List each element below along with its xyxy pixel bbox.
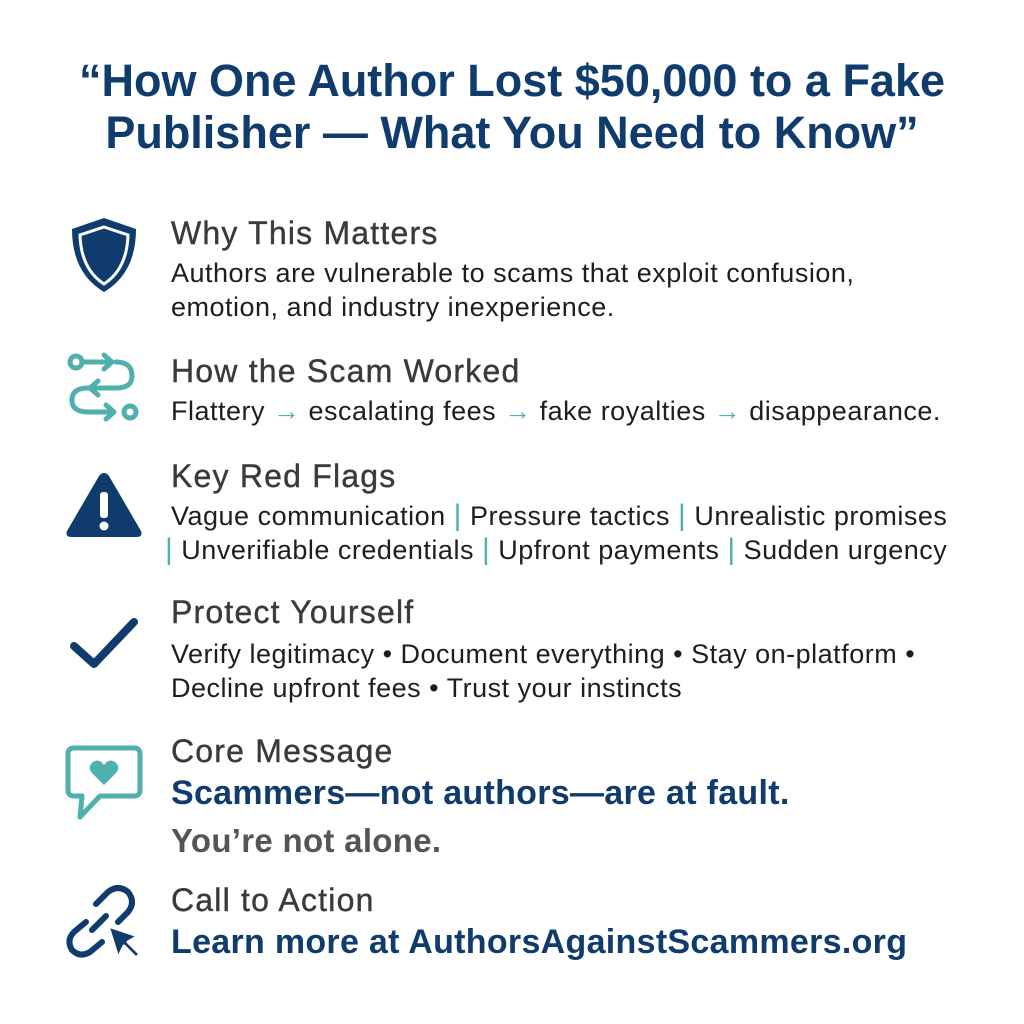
heading: core: Core Message bbox=[171, 733, 394, 769]
title: “How One Author Lost $50,000 to a Fake bbox=[79, 55, 945, 106]
text: red flags bbox=[165, 499, 947, 566]
text: red flags: | Unverifiable credentials | Upfront payments | Sudden urgency bbox=[165, 533, 947, 566]
text: protect: Verify legitimacy • Document everything • Stay on-platform • bbox=[171, 639, 915, 669]
text: protect: Decline upfront fees • Trust your instincts bbox=[171, 673, 682, 703]
heading: why: Why This Matters bbox=[171, 215, 439, 251]
text: protect bbox=[171, 639, 915, 703]
text: why: Authors are vulnerable to scams that exploit confusion, bbox=[171, 258, 854, 288]
icon: link cursor bbox=[66, 884, 138, 958]
text: why: emotion, and industry inexperience. bbox=[171, 292, 615, 322]
text: cta: Learn more at AuthorsAgainstScammers.org bbox=[171, 923, 907, 961]
icon: shield bbox=[72, 218, 136, 292]
text: core bbox=[171, 774, 790, 859]
heading: cta: Call to Action bbox=[171, 882, 375, 918]
heading: red flags: Key Red Flags bbox=[171, 458, 396, 494]
text: red flags: Vague communication | Pressure tactics | Unrealistic promises bbox=[171, 499, 947, 532]
icon: speech heart bbox=[66, 746, 142, 820]
icon: warning bbox=[66, 473, 142, 537]
text: core: You’re not alone. bbox=[171, 822, 441, 859]
heading: scam: How the Scam Worked bbox=[171, 353, 520, 389]
text: core: Scammers—not authors—are at fault. bbox=[171, 774, 790, 812]
title bbox=[79, 55, 945, 158]
icon: flow bbox=[68, 352, 138, 422]
title: Publisher — What You Need to Know” bbox=[105, 107, 919, 158]
icon: check bbox=[70, 618, 138, 668]
text: why bbox=[171, 258, 854, 322]
heading: protect: Protect Yourself bbox=[171, 594, 414, 630]
text: scam: Flattery → escalating fees → fake royalties → disappearance. bbox=[171, 396, 941, 426]
